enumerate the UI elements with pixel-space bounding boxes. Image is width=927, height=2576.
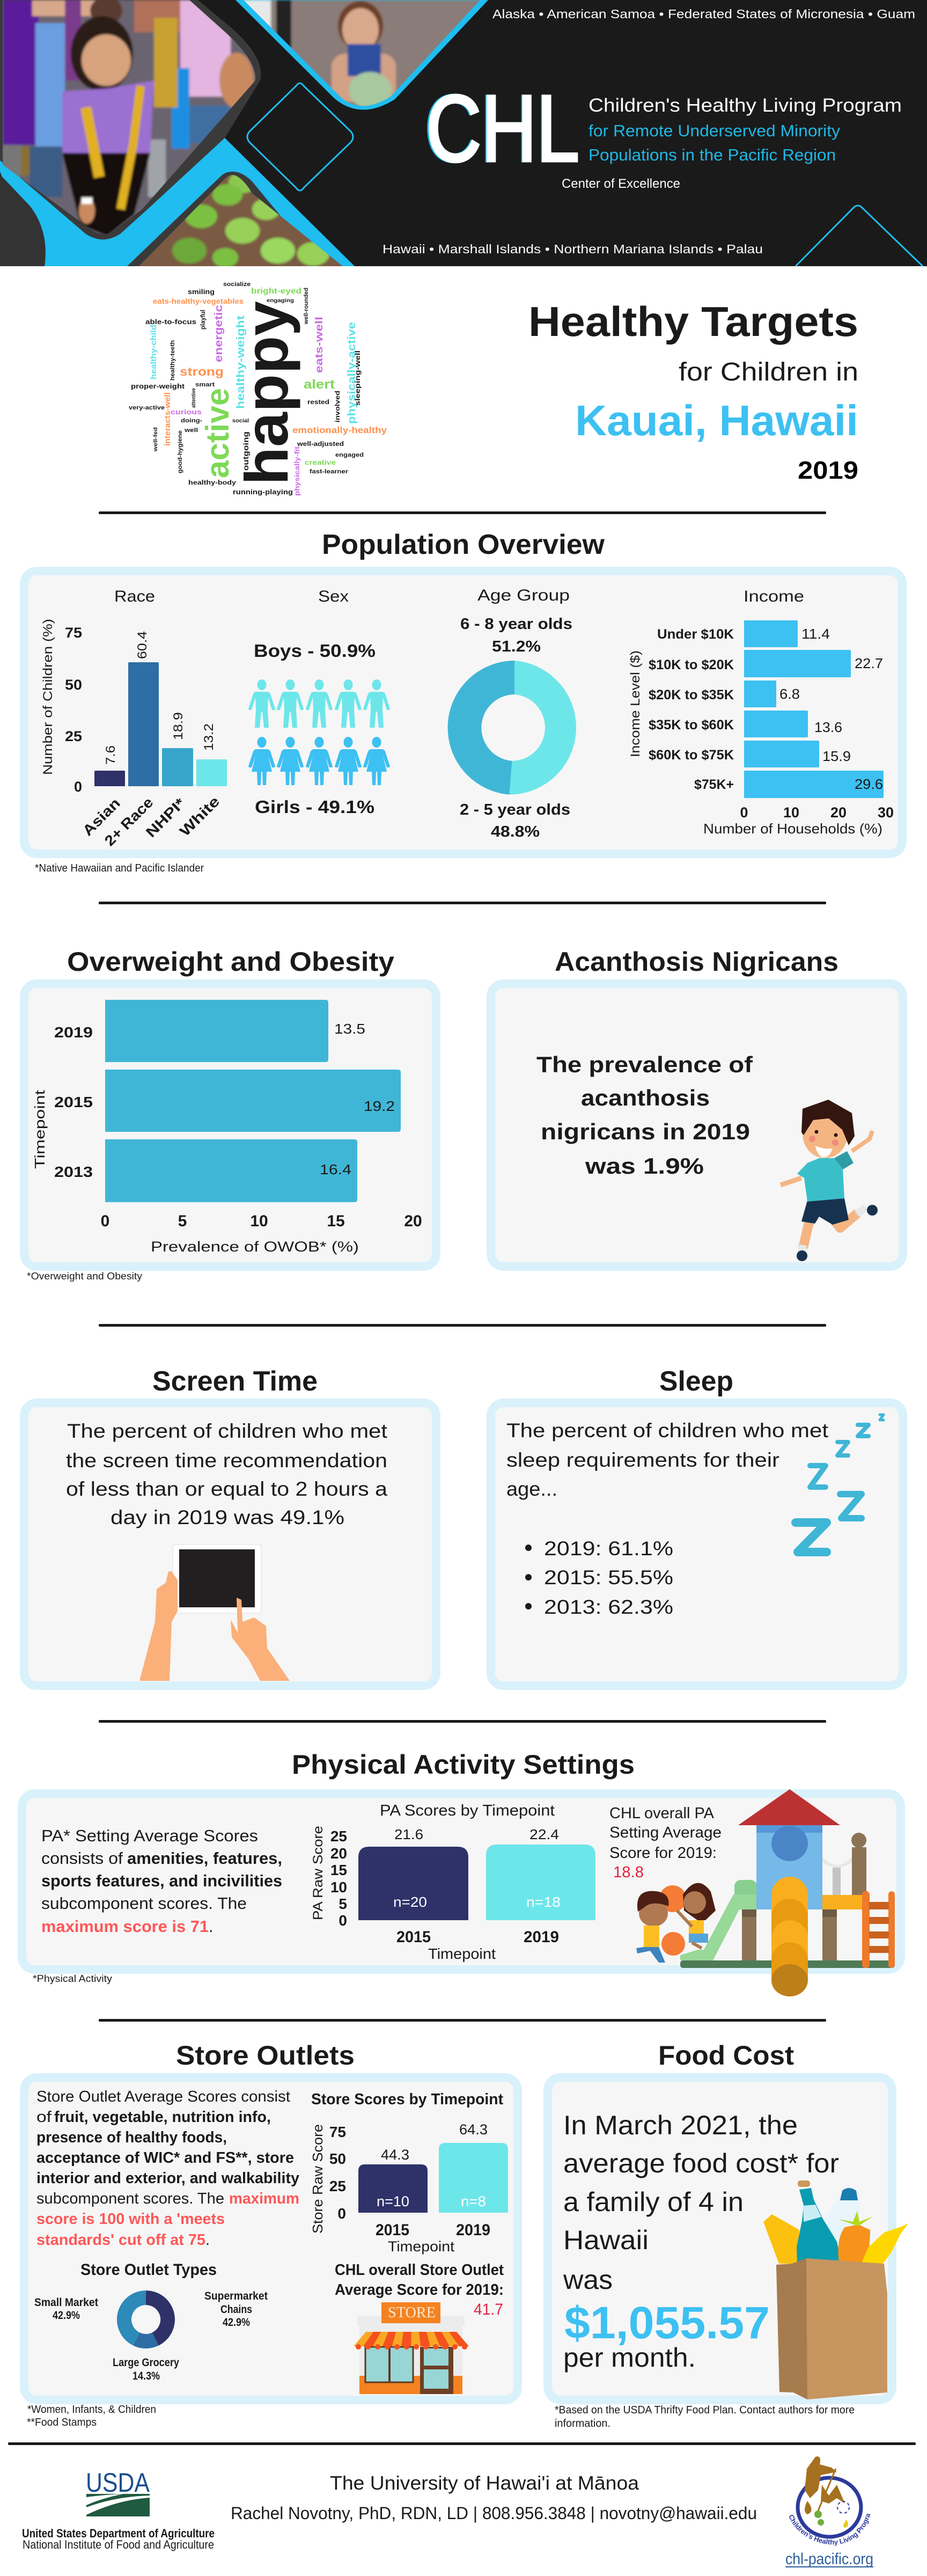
- icon: children with basketballs: [636, 1883, 716, 1963]
- heading: store outlets: Store Outlets: [176, 2040, 355, 2070]
- bar chart: OWOB prevalence: 20: [404, 1212, 422, 1230]
- jurisdictions top: Alaska • American Samoa • Federated States of Micronesia • Guam: [492, 7, 915, 21]
- chart: income: 13.6: [814, 719, 842, 735]
- bar chart: OWOB prevalence: 2015: [54, 1094, 93, 1110]
- heading: acanthosis nigricans: Acanthosis Nigricans: [555, 947, 838, 977]
- word cloud: doing-: [181, 418, 202, 424]
- word cloud: physically-active: [346, 322, 358, 424]
- bar chart: store scores: Store Raw Score: [310, 2124, 326, 2234]
- chart: sex: Sex: [318, 588, 349, 605]
- statement: day in 2019 was 49.1%: [111, 1506, 344, 1528]
- description text: maximum: [229, 2190, 299, 2207]
- photo: girl with lei: [3, 0, 255, 234]
- icon: storefront: STORE: [388, 2304, 436, 2321]
- donut chart: store outlet types: [34, 2261, 268, 2382]
- description text: of: [36, 2109, 52, 2126]
- icon: boys row: [248, 679, 390, 728]
- contact block: The University of Hawai'i at Mānoa: [330, 2472, 639, 2494]
- word cloud: healthy-child: [149, 325, 158, 379]
- icon: grocery bag: [763, 2180, 908, 2399]
- bar chart: OWOB prevalence: 16.4: [320, 1161, 351, 1177]
- bar chart: PA scores: n=20: [393, 1894, 427, 1910]
- bar chart: store scores: Timepoint: [388, 2238, 455, 2255]
- donut chart: store outlet types: Chains: [220, 2303, 252, 2316]
- chart: sex: [248, 588, 390, 817]
- word cloud: emotionally-healthy: [292, 425, 387, 435]
- main title: for Children in: [679, 358, 858, 386]
- word cloud: well-adjusted: [297, 440, 344, 448]
- description text: PA* Setting Average Scores: [41, 1826, 258, 1845]
- word cloud: eats-healthy-vegetables: [153, 297, 244, 305]
- word cloud: fast-learner: [310, 469, 349, 475]
- footnote: food cost: information.: [555, 2418, 610, 2429]
- word cloud: running-playing: [233, 488, 293, 496]
- word cloud: interacts-well: [163, 392, 172, 446]
- chart: income: Number of Households (%): [703, 821, 882, 837]
- bar chart: PA scores: 15: [330, 1862, 347, 1878]
- chart: race: 60.4: [135, 631, 150, 659]
- bar chart: PA scores: 10: [330, 1879, 347, 1896]
- word cloud: playful: [199, 310, 207, 330]
- statement: $1,055.57: [564, 2297, 770, 2348]
- bar chart: store scores: 64.3: [459, 2121, 488, 2138]
- icon: playground: [680, 1789, 895, 1996]
- bar chart: store scores: 50: [329, 2150, 346, 2167]
- overall PA score: Setting Average: [609, 1824, 722, 1841]
- bar chart: PA scores: 21.6: [394, 1826, 423, 1842]
- bar chart: PA scores: 2019: [524, 1928, 559, 1946]
- description text: maximum score is 71: [41, 1917, 209, 1936]
- heading: physical activity settings: Physical Activity Settings: [292, 1750, 635, 1780]
- bullet list: 2013: 62.3%: [544, 1596, 673, 1618]
- word cloud: outgoing: [241, 431, 250, 471]
- bar chart: PA scores: [311, 1802, 595, 1962]
- chart: income: 10: [783, 804, 799, 821]
- donut chart: store outlet types: Store Outlet Types: [80, 2261, 217, 2279]
- chart: income: 0: [740, 804, 748, 821]
- bar chart: store scores: Store Scores by Timepoint: [311, 2091, 503, 2108]
- bar chart: PA scores: Timepoint: [428, 1945, 496, 1962]
- main title: 2019: [798, 456, 858, 484]
- bar chart: OWOB prevalence: Timepoint: [32, 1089, 48, 1169]
- word cloud: eats-well: [314, 317, 325, 373]
- bar chart: OWOB prevalence: Prevalence of OWOB* (%): [151, 1239, 359, 1255]
- overall store score: Average Score for 2019:: [335, 2281, 504, 2299]
- chart: income: [628, 588, 894, 837]
- chart: income: 11.4: [801, 626, 830, 642]
- footnote: food cost: [555, 2404, 855, 2429]
- program title: Populations in the Pacific Region: [588, 145, 836, 164]
- word cloud: well-rounded: [303, 288, 310, 325]
- center of excellence: Center of Excellence: [562, 177, 680, 191]
- statement: Hawaii: [563, 2225, 649, 2255]
- word cloud: well: [184, 427, 198, 434]
- bar chart: PA scores: PA Raw Score: [311, 1826, 326, 1920]
- header banner: [0, 0, 927, 268]
- chart: race: Asian: [79, 795, 123, 839]
- overall PA score: Score for 2019:: [609, 1845, 717, 1862]
- logo: USDA: [22, 2468, 215, 2551]
- chart: race: 50: [65, 677, 82, 693]
- panel: acanthosis nigricans: [491, 984, 903, 1267]
- description text: Store Outlet Average Scores consist: [36, 2088, 290, 2105]
- word cloud: bright-eyed: [251, 287, 301, 296]
- overall store score: [335, 2262, 504, 2318]
- main title: Healthy Targets: [528, 298, 858, 345]
- word cloud: well-fed: [153, 427, 159, 452]
- contact block: [231, 2472, 757, 2523]
- footnote: food cost: *Based on the USDA Thrifty Food Plan. Contact authors for more: [555, 2404, 855, 2416]
- contact block: Rachel Novotny, PhD, RDN, LD | 808.956.3848 | novotny@hawaii.edu: [231, 2504, 757, 2523]
- bullet list: 2019: 61.1%: [544, 1538, 673, 1560]
- chart: age group: 6 - 8 year olds: [460, 616, 572, 633]
- statement: the screen time recommendation: [66, 1450, 387, 1472]
- chart: income: 22.7: [855, 655, 883, 671]
- bar chart: OWOB prevalence: 0: [101, 1212, 109, 1230]
- chart: income: 29.6: [855, 776, 883, 792]
- panel: overweight and obesity: [24, 984, 436, 1267]
- heading: food cost: Food Cost: [658, 2040, 794, 2070]
- chart: race: Race: [114, 588, 155, 605]
- program title: for Remote Underserved Minority: [588, 121, 841, 140]
- bar chart: PA scores: 0: [339, 1912, 347, 1929]
- word cloud: social: [232, 418, 249, 424]
- chart: race: 2+ Race: [101, 794, 157, 849]
- word cloud: engaging: [267, 298, 294, 304]
- bar chart: store scores: 75: [329, 2124, 346, 2140]
- description text: subcomponent scores. The: [41, 1894, 247, 1913]
- chart: income: Under $10K: [657, 627, 734, 642]
- description text: consists of: [41, 1849, 123, 1868]
- word cloud: rested: [307, 398, 329, 406]
- description text: [41, 1826, 282, 1936]
- description text: fruit, vegetable, nutrition info,: [54, 2109, 271, 2126]
- word cloud: attentive: [191, 388, 197, 408]
- chart: income: $10K to $20K: [649, 657, 734, 672]
- word cloud: engaged: [335, 452, 364, 458]
- chart: age group: Age Group: [477, 587, 570, 604]
- chart: race: White: [176, 793, 223, 839]
- bar chart: PA scores: 20: [330, 1845, 347, 1862]
- bar chart: OWOB prevalence: 2013: [54, 1163, 93, 1180]
- footnote: OWOB: *Overweight and Obesity: [27, 1271, 142, 1282]
- word cloud: healthy-body: [188, 479, 236, 486]
- bar chart: PA scores: PA Scores by Timepoint: [380, 1802, 555, 1819]
- chart: income: $60K to $75K: [649, 748, 734, 763]
- word cloud: creative: [305, 458, 336, 466]
- bar chart: store scores: [310, 2091, 508, 2255]
- statement: [66, 1420, 388, 1528]
- chart: race: 25: [65, 728, 82, 744]
- description text: [36, 2088, 299, 2249]
- description text: .: [209, 1917, 214, 1936]
- description text: .: [205, 2231, 210, 2249]
- footnote: store: [27, 2404, 156, 2428]
- statement: per month.: [563, 2343, 696, 2373]
- bar chart: PA scores: 5: [339, 1896, 347, 1912]
- description text: acceptance of WIC* and FS**, store: [36, 2149, 294, 2167]
- description text: score is 100 with a 'meets: [36, 2211, 225, 2228]
- bar chart: store scores: n=8: [461, 2193, 486, 2209]
- photo: lettuce rows: [139, 175, 343, 266]
- bar chart: OWOB prevalence: 19.2: [364, 1098, 395, 1114]
- bullet list: 2015: 55.5%: [544, 1567, 673, 1589]
- statement: average food cost* for: [563, 2148, 839, 2178]
- bar chart: PA scores: 2015: [396, 1928, 431, 1946]
- bar chart: PA scores: n=18: [526, 1894, 561, 1910]
- description text: sports features, and incivilities: [41, 1871, 282, 1890]
- description text: subcomponent scores. The: [36, 2190, 224, 2207]
- word cloud: good-hygiene: [177, 430, 183, 473]
- logo: USDA: United States Department of Agriculture: [22, 2527, 215, 2540]
- panel: screen time: [24, 1403, 436, 1686]
- statement: sleep requirements for their: [506, 1449, 779, 1471]
- bar chart: PA scores: 25: [330, 1828, 347, 1845]
- chart: income: 20: [830, 804, 847, 821]
- bar chart: OWOB prevalence: 15: [327, 1212, 345, 1230]
- statement: of less than or equal to 2 hours a: [66, 1478, 387, 1500]
- bar chart: OWOB prevalence: 13.5: [334, 1021, 365, 1037]
- chart: income: 30: [878, 804, 894, 821]
- donut chart: store outlet types: Small Market: [34, 2296, 98, 2309]
- bar chart: OWOB prevalence: [32, 1000, 422, 1255]
- program title: Children's Healthy Living Program: [588, 95, 902, 116]
- donut chart: store outlet types: Supermarket: [204, 2290, 268, 2302]
- word cloud: [129, 281, 387, 496]
- jurisdictions bottom: Hawaii • Marshall Islands • Northern Mariana Islands • Palau: [382, 242, 763, 256]
- statement: was 1.9%: [585, 1153, 704, 1179]
- word cloud: smiling: [188, 288, 215, 296]
- word cloud: curious: [171, 408, 202, 416]
- word cloud: physically-fit: [293, 446, 301, 496]
- triangle outline: [796, 206, 923, 266]
- donut chart: store outlet types: 42.9%: [53, 2309, 80, 2322]
- main title: Kauai, Hawaii: [575, 397, 858, 444]
- chart: race: 75: [65, 625, 82, 641]
- overall store score: 41.7: [474, 2301, 503, 2318]
- icon: storefront: [354, 2302, 469, 2394]
- donut chart: store outlet types: Large Grocery: [113, 2357, 179, 2369]
- chart: income: Income Level ($): [628, 650, 643, 757]
- word cloud: proper-weight: [131, 382, 185, 390]
- statement: a family of 4 in: [563, 2187, 744, 2217]
- logo: CHL: chl-pacific.org: [785, 2550, 873, 2568]
- chart: race: 18.9: [171, 712, 186, 740]
- overall store score: CHL overall Store Outlet: [335, 2262, 504, 2279]
- panel: physical activity settings: [22, 1789, 901, 1996]
- heading: population overview: Population Overview: [322, 529, 605, 560]
- overall PA score: [609, 1805, 722, 1881]
- chart: race: NHPI*: [143, 795, 188, 840]
- statement: The prevalence of: [536, 1052, 753, 1077]
- chart: race: 7.6: [104, 745, 118, 765]
- word cloud: active: [200, 388, 236, 478]
- main title: [528, 298, 858, 484]
- chart: age group: [448, 587, 576, 840]
- footnote: PA: *Physical Activity: [33, 1973, 112, 1984]
- chart: race: 0: [74, 779, 82, 795]
- chart: age group: 48.8%: [491, 823, 540, 840]
- bar chart: OWOB prevalence: 5: [178, 1212, 187, 1230]
- word cloud: able-to-focus: [145, 318, 196, 326]
- bar chart: store scores: n=10: [377, 2193, 409, 2209]
- bar chart: store scores: 44.3: [381, 2147, 409, 2163]
- diamond outline: [247, 83, 353, 191]
- logo: USDA: National Institute of Food and Agriculture: [23, 2538, 214, 2551]
- bar chart: OWOB prevalence: 10: [250, 1212, 268, 1230]
- bar chart: store scores: 25: [329, 2178, 346, 2194]
- chart: income: $75K+: [694, 777, 734, 792]
- footnote: store: *Women, Infants, & Children: [27, 2404, 156, 2416]
- overall PA score: CHL overall PA: [609, 1805, 715, 1822]
- description text: amenities, features,: [127, 1849, 282, 1868]
- word cloud: socialize: [223, 281, 251, 288]
- description text: standards' cut off at 75: [36, 2231, 205, 2249]
- statement: [536, 1052, 753, 1179]
- statement: age...: [506, 1478, 557, 1500]
- logo: CHL: Children's Healthy Living Program: [789, 2514, 871, 2546]
- statement: [563, 2110, 839, 2373]
- blue backdrop shape: [0, 138, 355, 266]
- program title: [588, 95, 902, 164]
- bar chart: PA scores: 22.4: [529, 1826, 559, 1842]
- statement: acanthosis: [581, 1085, 710, 1110]
- bar chart: store scores: 2015: [376, 2221, 409, 2239]
- word cloud: energetic: [213, 305, 225, 362]
- logo: USDA: USDA: [86, 2468, 150, 2498]
- word cloud: smart: [195, 382, 215, 388]
- chart: race: Number of Children (%): [41, 619, 55, 775]
- description text: presence of healthy foods,: [36, 2129, 227, 2146]
- word cloud: healthy-weight: [235, 316, 247, 409]
- footnote: NHPI: *Native Hawaiian and Pacific Islander: [35, 862, 204, 874]
- chart: race: [41, 588, 227, 849]
- word cloud: sleeping-well: [354, 350, 362, 406]
- bar chart: store scores: 2019: [456, 2221, 490, 2239]
- statement: The percent of children who met: [506, 1419, 829, 1441]
- statement: In March 2021, the: [563, 2110, 798, 2140]
- word cloud: involved: [334, 391, 341, 422]
- icon: tablet with hands: [139, 1545, 290, 1681]
- overall PA score: 18.8: [613, 1864, 644, 1881]
- photo: child holding bag: [244, 0, 480, 106]
- statement: nigricans in 2019: [541, 1119, 750, 1144]
- chart: income: 6.8: [779, 686, 800, 702]
- panel: food cost: [548, 2077, 908, 2400]
- bar chart: OWOB prevalence: 2019: [54, 1024, 93, 1041]
- chart: income: $20K to $35K: [649, 687, 734, 702]
- chart: age group: 51.2%: [492, 638, 541, 655]
- word cloud: alert: [304, 377, 335, 392]
- chart: age group: 2 - 5 year olds: [460, 801, 570, 818]
- heading: screen time: Screen Time: [152, 1366, 318, 1397]
- bar chart: store scores: 0: [337, 2205, 346, 2222]
- bullet list: [525, 1538, 673, 1618]
- footnote: store: **Food Stamps: [27, 2417, 97, 2428]
- panel: population overview: [24, 571, 902, 854]
- word cloud: happy: [233, 301, 300, 485]
- CHL logotype: CHL: [424, 76, 579, 181]
- panel: sleep: [491, 1403, 903, 1686]
- chart: sex: Girls - 49.1%: [255, 797, 374, 817]
- chart: sex: Boys - 50.9%: [254, 641, 376, 661]
- icon: running boy: [781, 1100, 878, 1261]
- CHL logotype: CHL: [426, 76, 579, 181]
- statement: was: [563, 2265, 613, 2295]
- panel: store outlets: [24, 2077, 518, 2400]
- chart: income: 15.9: [822, 748, 851, 764]
- heading: overweight and obesity: Overweight and Obesity: [67, 947, 394, 977]
- icon: girls row: [248, 737, 390, 785]
- chart: income: Income: [744, 588, 804, 605]
- word cloud: strong: [180, 365, 224, 378]
- word cloud: healthy-teeth: [170, 340, 176, 380]
- statement: [506, 1419, 829, 1500]
- donut chart: store outlet types: 14.3%: [133, 2370, 160, 2382]
- heading: sleep: Sleep: [659, 1366, 733, 1397]
- chart: race: 13.2: [202, 723, 216, 751]
- donut chart: store outlet types: 42.9%: [223, 2316, 250, 2329]
- chart: income: $35K to $60K: [649, 718, 734, 733]
- icon: sleep z's: [796, 1415, 884, 1552]
- description text: interior and exterior, and walkability: [36, 2170, 299, 2187]
- word cloud: very-active: [129, 405, 165, 411]
- statement: The percent of children who met: [67, 1420, 388, 1442]
